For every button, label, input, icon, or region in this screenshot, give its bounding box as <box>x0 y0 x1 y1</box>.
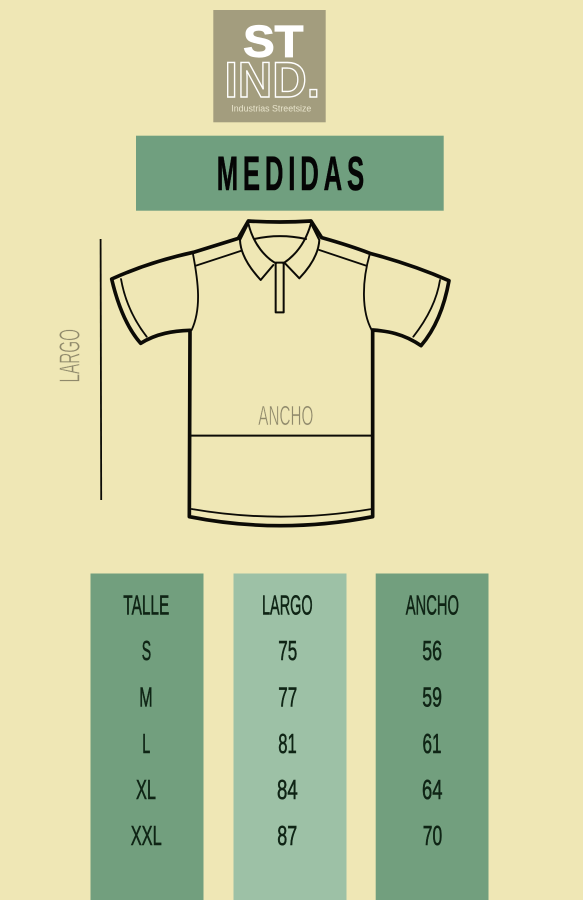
logo text: IND.: IND. <box>224 52 320 108</box>
value: 59: 59 <box>422 681 442 712</box>
value: 70: 70 <box>423 820 442 851</box>
column: ancho <box>376 574 488 900</box>
header: largo: LARGO <box>262 589 313 620</box>
value: 87: 87 <box>277 820 297 851</box>
value: 61: 61 <box>422 728 442 759</box>
value: 64: 64 <box>422 774 442 805</box>
value: 56: 56 <box>422 635 442 666</box>
value: S: S <box>142 635 151 666</box>
value: 77: 77 <box>278 681 297 712</box>
label: ancho: ANCHO <box>258 400 313 431</box>
value: L: L <box>142 728 150 759</box>
measure line: largo <box>100 239 102 500</box>
logo text: ST: ST <box>243 18 303 67</box>
logo <box>213 10 326 122</box>
icon: polo shirt outline <box>112 221 449 526</box>
value: XL: XL <box>136 774 156 805</box>
header: ancho: ANCHO <box>406 589 459 620</box>
logo tagline: Industrias Streetsize <box>231 104 311 114</box>
value: 81: 81 <box>278 728 297 759</box>
label: largo: LARGO <box>54 329 86 382</box>
value: M: M <box>139 681 153 712</box>
value: 84: 84 <box>277 774 298 805</box>
value: XXL: XXL <box>131 820 162 851</box>
title: MEDIDAS <box>217 148 369 201</box>
value: 75: 75 <box>278 635 297 666</box>
column: talle <box>90 574 204 900</box>
column: largo <box>234 574 346 900</box>
title banner <box>136 136 444 211</box>
header: talle: TALLE <box>123 589 169 620</box>
